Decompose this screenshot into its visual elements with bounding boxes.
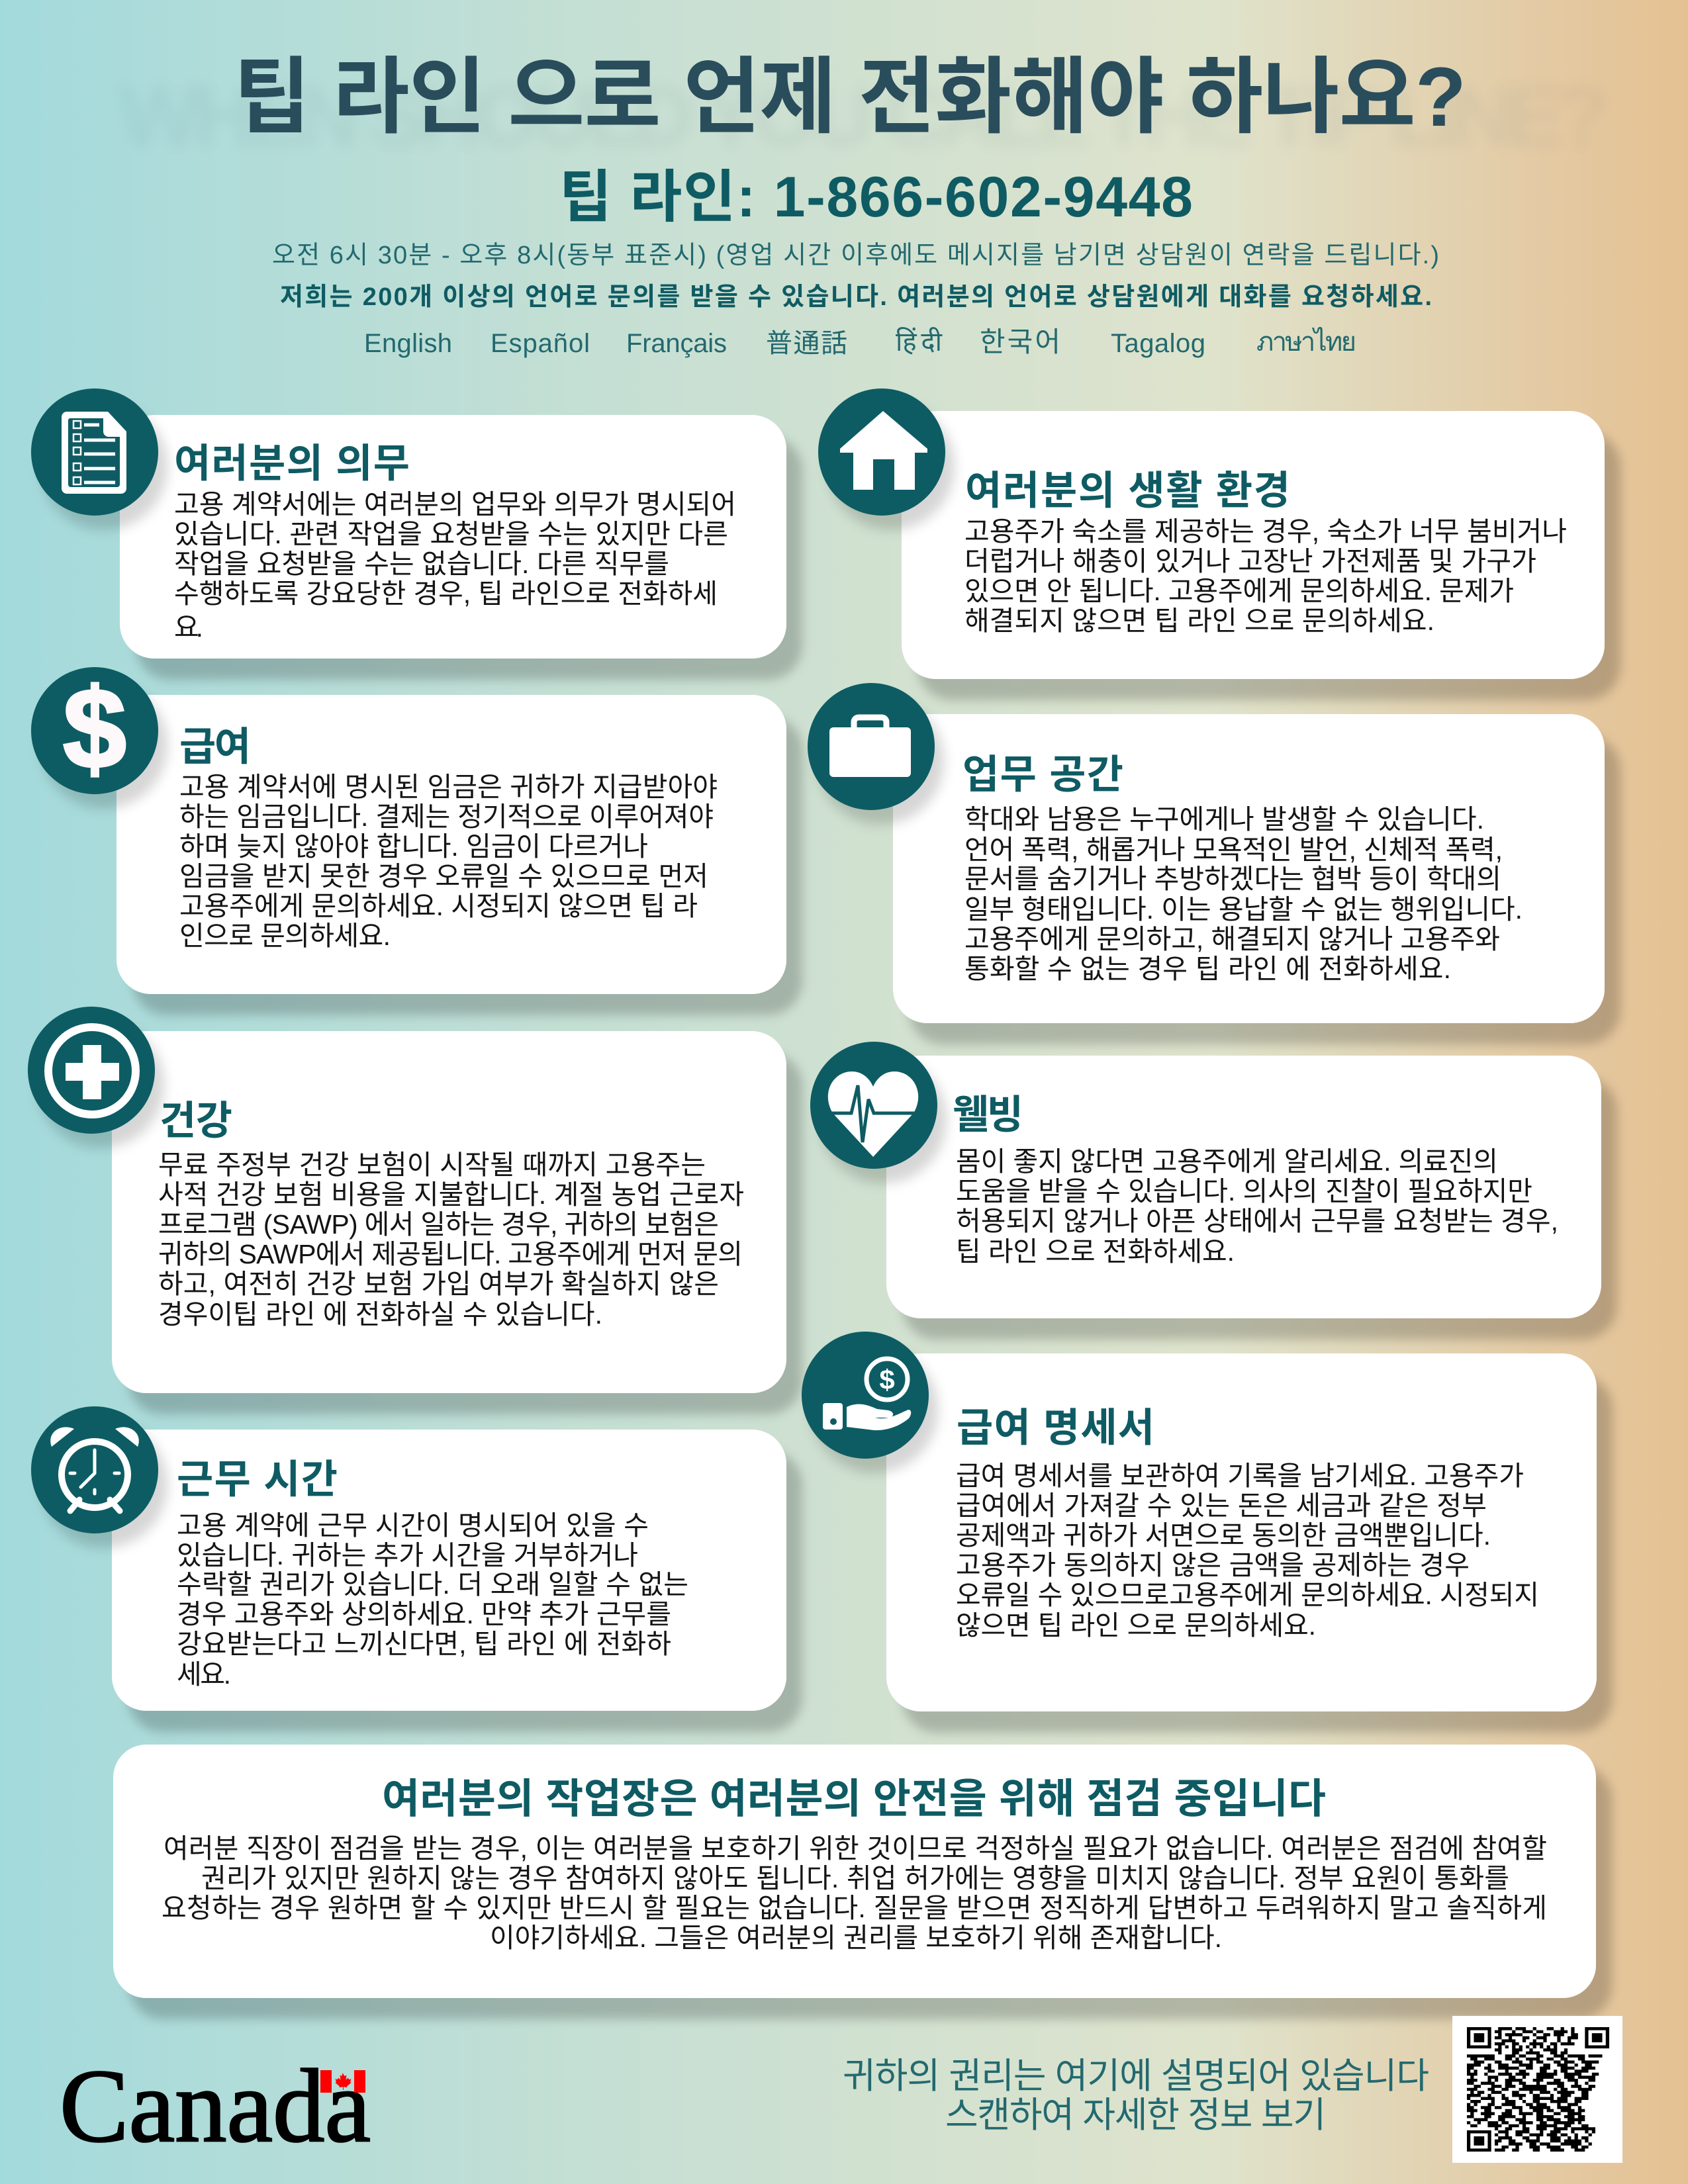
panel: health: [28, 1007, 786, 1393]
body text: 요.: [174, 612, 203, 643]
panel: pay: [31, 665, 786, 994]
icon: hand holding coin: $: [879, 1364, 895, 1395]
icon: briefcase: [808, 683, 935, 810]
icon: Canadian flag: [320, 2070, 365, 2093]
body text: 급여에서 가져갈 수 있는 돈은 세금과 같은 정부: [956, 1490, 1487, 1521]
body text: 경우 고용주와 상의하세요. 만약 추가 근무를: [177, 1599, 671, 1629]
body text: 수행하도록 강요당한 경우, 팁 라인으로 전화하세: [174, 578, 718, 609]
heading: 근무 시간: [177, 1457, 338, 1502]
body text: 작업을 요청받을 수는 없습니다. 다른 직무를: [174, 549, 669, 579]
title shadow: WHEN SHOULD YOU CALL THE TIP LINE?: [119, 68, 1609, 164]
heading: 업무 공간: [962, 752, 1123, 797]
panel: wellness: [810, 1042, 1601, 1318]
icon: heart with pulse: [810, 1042, 937, 1169]
language list: Español: [491, 329, 590, 358]
tip line phone number: 팁 라인: 1-866-602-9448: [559, 165, 1193, 229]
heading: 급여: [179, 725, 251, 769]
body text: 있으면 안 됩니다. 고용주에게 문의하세요. 문제가: [964, 576, 1514, 606]
language list: Français: [626, 329, 727, 358]
body text: 공제액과 귀하가 서면으로 동의한 금액뿐입니다.: [956, 1520, 1491, 1551]
body text: 더럽거나 해충이 있거나 고장난 가전제품 및 가구가: [964, 546, 1536, 576]
body text: 고용 계약서에 명시된 임금은 귀하가 지급받아야: [179, 772, 718, 802]
body text: 사적 건강 보험 비용을 지불합니다. 계절 농업 근로자: [158, 1179, 744, 1210]
body text: 권리가 있지만 원하지 않는 경우 참여하지 않아도 됩니다. 취업 허가에는 영향을 미치지 않습니다. 정부 요원이 통화를: [201, 1863, 1509, 1893]
panel: your duties: [31, 388, 786, 659]
heading: 급여 명세서: [957, 1406, 1154, 1450]
body text: 수락할 권리가 있습니다. 더 오래 일할 수 없는: [177, 1569, 688, 1600]
body text: 있습니다. 관련 작업을 요청받을 수는 있지만 다른: [174, 519, 728, 549]
body text: [956, 1461, 1539, 1641]
body text: [964, 804, 1523, 984]
heading: 웰빙: [953, 1093, 1023, 1137]
body text: 경우이팁 라인 에 전화하실 수 있습니다.: [158, 1299, 602, 1330]
icon: alarm clock: [31, 1406, 158, 1533]
logo: Canada wordmark: Canada: [60, 2048, 371, 2164]
body text: 세요.: [177, 1659, 231, 1690]
body text: 언어 폭력, 해롭거나 모욕적인 발언, 신체적 폭력,: [964, 835, 1503, 865]
language list: 普通話: [766, 329, 847, 358]
body text: [162, 1833, 1547, 1953]
body text: 통화할 수 없는 경우 팁 라인 에 전화하세요.: [964, 954, 1451, 984]
heading: 여러분의 작업장은 여러분의 안전을 위해 점검 중입니다: [382, 1776, 1326, 1822]
body text: 강요받는다고 느끼신다면, 팁 라인 에 전화하: [177, 1629, 671, 1659]
language list: Tagalog: [1111, 329, 1205, 358]
body text: 고용주에게 문의하고, 해결되지 않거나 고용주와: [964, 924, 1500, 954]
body text: [964, 516, 1567, 636]
body text: 학대와 남용은 누구에게나 발생할 수 있습니다.: [964, 804, 1484, 835]
body text: 급여 명세서를 보관하여 기록을 남기세요. 고용주가: [956, 1461, 1524, 1491]
footer call to action: 귀하의 권리는 여기에 설명되어 있습니다: [843, 2056, 1429, 2096]
body text: 임금을 받지 못한 경우 오류일 수 있으므로 먼저: [179, 861, 708, 891]
panel: workplace inspection: [113, 1745, 1596, 1998]
heading: 여러분의 생활 환경: [965, 469, 1290, 513]
body text: 허용되지 않거나 아픈 상태에서 근무를 요청받는 경우,: [956, 1206, 1558, 1236]
body text: 고용주에게 문의하세요. 시정되지 않으면 팁 라: [179, 891, 698, 921]
panel: pay statement: [802, 1332, 1597, 1711]
body text: 고용 계약에 근무 시간이 명시되어 있을 수: [177, 1510, 649, 1541]
body text: 귀하의 SAWP에서 제공됩니다. 고용주에게 먼저 문의: [158, 1239, 743, 1269]
body text: 팁 라인 으로 전화하세요.: [956, 1236, 1235, 1267]
body text: 하고, 여전히 건강 보험 가입 여부가 확실하지 않은: [158, 1269, 719, 1299]
body text: 인으로 문의하세요.: [179, 921, 391, 951]
body text: 프로그램 (SAWP) 에서 일하는 경우, 귀하의 보험은: [158, 1209, 719, 1240]
panel: working hours: [31, 1406, 786, 1711]
panel: workplace: [808, 683, 1605, 1023]
body text: 일부 형태입니다. 이는 용납할 수 없는 행위입니다.: [964, 894, 1523, 925]
body text: 있습니다. 귀하는 추가 시간을 거부하거나: [177, 1540, 638, 1570]
icon: dollar sign: $: [63, 665, 126, 792]
icon: medical cross: [28, 1007, 155, 1134]
body text: 오류일 수 있으므로고용주에게 문의하세요. 시정되지: [956, 1580, 1539, 1610]
icon: dollar sign: [31, 665, 158, 794]
body text: [158, 1150, 744, 1330]
QR code: [1452, 2016, 1622, 2163]
language list: English: [364, 329, 452, 358]
heading: 건강: [160, 1099, 232, 1143]
body text: 고용 계약서에는 여러분의 업무와 의무가 명시되어: [174, 489, 736, 520]
heading: 여러분의 의무: [174, 441, 410, 486]
title: 팁 라인 으로 언제 전화해야 하나요?: [234, 50, 1466, 144]
body text: 도움을 받을 수 있습니다. 의사의 진찰이 필요하지만: [956, 1176, 1532, 1206]
body text: 해결되지 않으면 팁 라인 으로 문의하세요.: [964, 606, 1434, 636]
footer call to action: 스캔하여 자세한 정보 보기: [945, 2095, 1326, 2135]
body text: 고용주가 동의하지 않은 금액을 공제하는 경우: [956, 1550, 1470, 1580]
body text: 않으면 팁 라인 으로 문의하세요.: [956, 1610, 1316, 1641]
panel: living conditions: [818, 388, 1605, 679]
body text: 여러분 직장이 점검을 받는 경우, 이는 여러분을 보호하기 위한 것이므로 걱정하실 필요가 없습니다. 여러분은 점검에 참여할: [164, 1833, 1547, 1864]
body text: [174, 489, 736, 643]
language list: [364, 326, 1356, 358]
language list: 한국어: [980, 326, 1060, 357]
opening hours: 오전 6시 30분 - 오후 8시(동부 표준시) (영업 시간 이후에도 메시지를 남기면 상담원이 연락을 드립니다.): [272, 242, 1439, 269]
body text: [177, 1510, 688, 1690]
language list: ภาษาไทย: [1256, 327, 1356, 357]
body text: 고용주가 숙소를 제공하는 경우, 숙소가 너무 붐비거나: [964, 516, 1567, 547]
icon: checklist document: [31, 388, 158, 516]
body text: 무료 주정부 건강 보험이 시작될 때까지 고용주는: [158, 1150, 706, 1180]
body text: 몸이 좋지 않다면 고용주에게 알리세요. 의료진의: [956, 1146, 1498, 1177]
body text: 하며 늦지 않아야 합니다. 임금이 다르거나: [179, 831, 648, 862]
body text: 문서를 숨기거나 추방하겠다는 협박 등이 학대의: [964, 864, 1501, 894]
body text: [179, 772, 718, 951]
icon: house: [818, 388, 945, 516]
body text: 이야기하세요. 그들은 여러분의 권리를 보호하기 위해 존재합니다.: [490, 1923, 1222, 1953]
body text: 요청하는 경우 원하면 할 수 있지만 반드시 할 필요는 없습니다. 질문을 받으면 정직하게 답변하고 두려워하지 말고 솔직하게: [162, 1893, 1547, 1923]
footer call to action: [843, 2056, 1429, 2135]
language list: हिंदी: [896, 327, 943, 357]
languages note: 저희는 200개 이상의 언어로 문의를 받을 수 있습니다. 여러분의 언어로 상담원에게 대화를 요청하세요.: [280, 283, 1432, 311]
icon: hand holding coin: [802, 1332, 929, 1459]
body text: 하는 임금입니다. 결제는 정기적으로 이루어져야: [179, 801, 714, 832]
body text: [956, 1146, 1558, 1267]
